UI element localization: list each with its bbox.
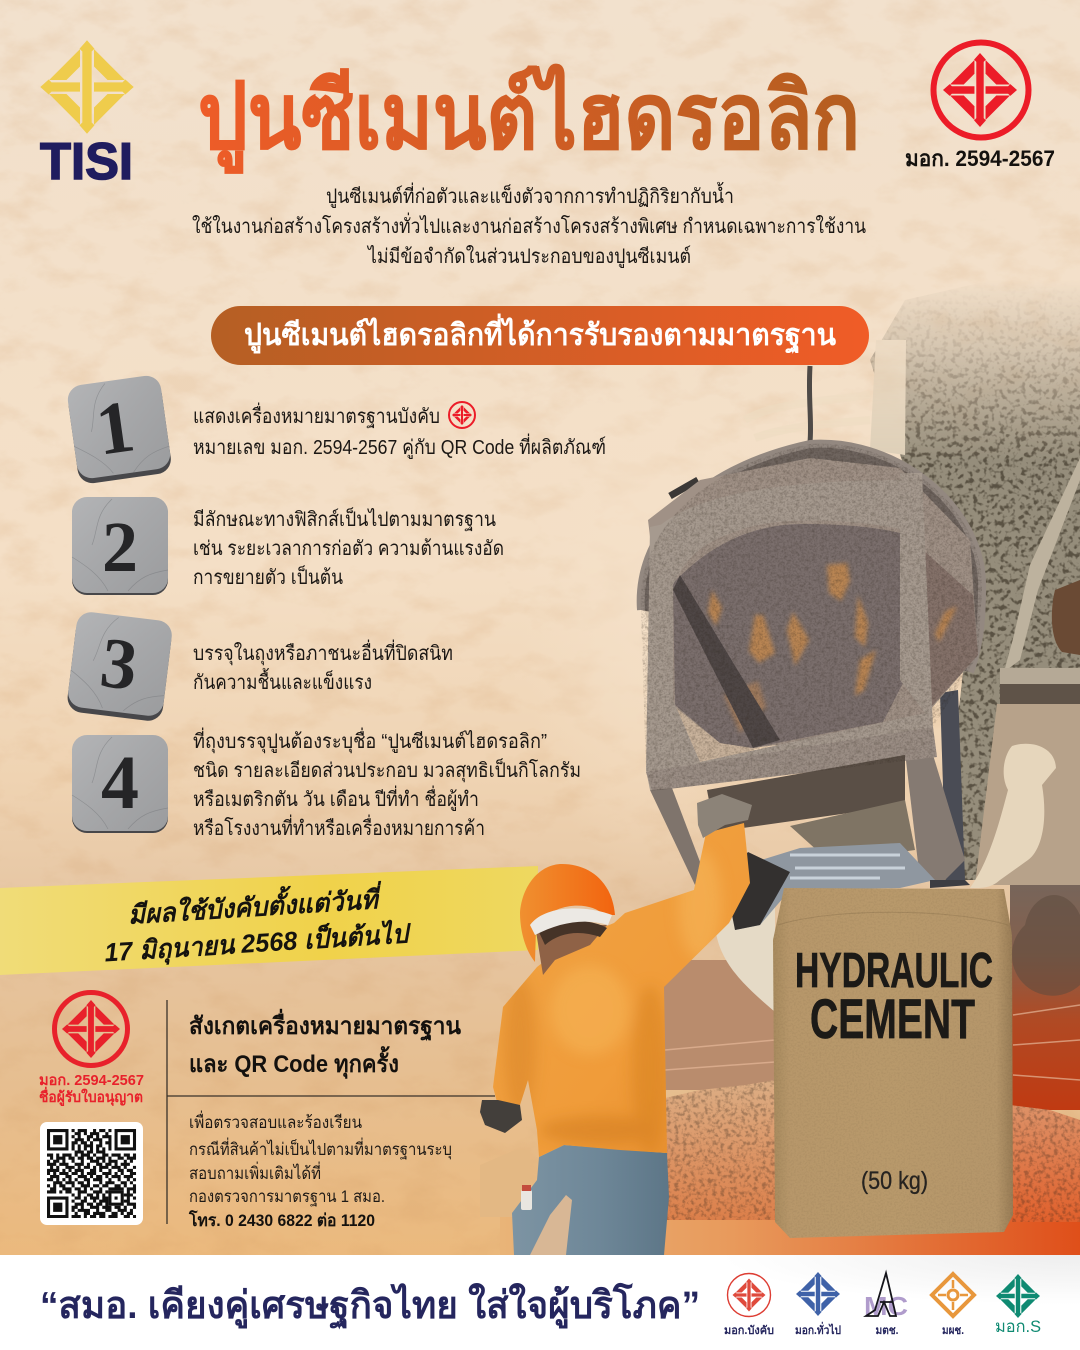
logo: mandatory standard — [724, 1274, 774, 1337]
dark cone window — [673, 524, 903, 748]
bag label: HYDRAULIC — [795, 944, 993, 998]
contact text: โทร. 0 2430 6822 ต่อ 1120 — [188, 1210, 375, 1230]
logo: community product — [932, 1274, 974, 1337]
logo: MPC tower: มตช. — [876, 1325, 898, 1337]
frame — [646, 473, 935, 790]
tile 4 — [72, 735, 168, 833]
far legs — [905, 690, 965, 880]
heading pill — [211, 306, 869, 365]
bag label — [795, 944, 993, 1195]
item 2 text: มีลักษณะทางฟิสิกส์เป็นไปตามมาตรฐาน — [193, 506, 496, 531]
logo: MPC tower — [864, 1273, 908, 1337]
rope — [809, 366, 811, 442]
logo: TISI — [40, 40, 134, 191]
notice panel — [167, 1000, 495, 1230]
contact text: กรณีที่สินค้าไม่เป็นไปตามที่มาตรฐานระบุ — [189, 1137, 452, 1160]
contact text: เพื่อตรวจสอบและร้องเรียน — [189, 1110, 362, 1132]
intro paragraph: ใช้ในงานก่อสร้างโครงสร้างทั่วไปและงานก่อสร้างโครงสร้างพิเศษ กำหนดเฉพาะการใช้งาน — [192, 212, 866, 238]
intro paragraph: ปูนซีเมนต์ที่ก่อตัวและแข็งตัวจากการทำปฏิกิริยากับน้ำ — [326, 182, 734, 209]
slogan: “สมอ. เคียงคู่เศรษฐกิจไทย ใส่ใจผู้บริโภค” — [40, 1282, 700, 1330]
standard mark with licensee label: มอก. 2594-2567 — [39, 1073, 144, 1089]
item 3 text: บรรจุในถุงหรือภาชนะอื่นที่ปิดสนิท — [193, 639, 453, 666]
title: ปูนซีเมนต์ไฮดรอลิก — [198, 64, 860, 174]
glove raised — [697, 794, 752, 838]
heading pill: ปูนซีเมนต์ไฮดรอลิกที่ได้การรับรองตามมาตรฐาน — [244, 313, 836, 355]
icon: small standard mark — [449, 402, 475, 428]
banner text: มีผลใช้บังคับตั้งแต่วันที่ — [127, 879, 383, 930]
standard mark: TIS 2594-2567: มอก. 2594-2567 — [905, 146, 1055, 171]
banner: effective date — [0, 866, 538, 975]
contact text: กองตรวจการมาตรฐาน 1 สมอ. — [189, 1187, 385, 1207]
neck and head — [535, 921, 607, 975]
notice heading: สังเกตเครื่องหมายมาตรฐาน — [189, 1008, 462, 1042]
item 1 text: แสดงเครื่องหมายมาตรฐานบังคับ — [193, 402, 440, 428]
bag label: CEMENT — [810, 987, 975, 1050]
photo: cloth rag — [970, 744, 1056, 888]
logo: community product: มผช. — [942, 1325, 964, 1337]
logo: TIS S: มอก.S — [995, 1317, 1041, 1336]
item 4 text: หรือโรงงานที่ทำหรือเครื่องหมายการค้า — [193, 814, 485, 840]
cone body — [648, 458, 978, 748]
item 4 text: หรือเมตริกตัน วัน เดือน ปีที่ทำ ชื่อผู้ทำ — [193, 785, 479, 812]
logo: general standard — [795, 1272, 841, 1337]
footer band — [0, 1255, 1080, 1350]
item 2 text: การขยายตัว เป็นต้น — [193, 564, 343, 589]
tile 2 — [72, 497, 168, 595]
item 4 text: ที่ถุงบรรจุปูนต้องระบุชื่อ “ปูนซีเมนต์ไฮดรอลิก” — [193, 727, 547, 754]
item 4 text — [193, 727, 581, 840]
item 3 text — [193, 639, 453, 694]
notice heading: และ QR Code ทุกครั้ง — [189, 1045, 399, 1080]
contact text: สอบถามเพิ่มเติมได้ที่ — [189, 1161, 321, 1183]
tool belt — [521, 1185, 572, 1255]
tile 4: 4 — [101, 741, 139, 825]
diagonal strut — [673, 575, 780, 748]
logo: general standard: มอก.ทั่วไป — [795, 1321, 841, 1337]
logo: TIS S — [995, 1274, 1041, 1336]
logo: MPC tower: MC — [864, 1291, 908, 1321]
item 2 text: เช่น ระยะเวลาการก่อตัว ความต้านแรงอัด — [193, 538, 504, 560]
hard hat — [520, 864, 615, 962]
intro paragraph — [192, 182, 866, 269]
bag label: (50 kg) — [861, 1167, 928, 1195]
item 4 text: ชนิด รายละเอียดส่วนประกอบ มวลสุทธิเป็นกิโลกรัม — [193, 757, 581, 783]
item 1 text: หมายเลข มอก. 2594-2567 คู่กับ QR Code ที่ผลิตภัณฑ์ — [193, 433, 606, 460]
standard mark with licensee label: ชื่อผู้รับใบอนุญาต — [39, 1086, 143, 1106]
rim — [641, 444, 982, 672]
QR code — [40, 1122, 143, 1225]
banner text — [101, 877, 413, 969]
photo: sand piles and bottom strip — [480, 1075, 1080, 1255]
photo: concrete bucket — [640, 366, 985, 930]
standard mark with licensee label — [39, 992, 144, 1106]
photo: cement bag — [770, 885, 1015, 1240]
item 3 text: กันความชื้นและแข็งแรง — [193, 668, 372, 694]
tile 3 — [66, 611, 173, 722]
item 1 text — [193, 402, 606, 460]
glove lowered — [480, 1100, 522, 1133]
tile 2: 2 — [102, 507, 138, 587]
jeans — [512, 1145, 669, 1255]
rubble under bucket — [725, 843, 970, 930]
logo: mandatory standard: มอก.บังคับ — [724, 1324, 774, 1337]
contact text — [188, 1110, 452, 1230]
item 2 text — [193, 506, 504, 589]
tile 3: 3 — [96, 622, 142, 706]
intro paragraph: ไม่มีข้อจำกัดในส่วนประกอบของปูนซีเมนต์ — [366, 245, 691, 269]
standard mark: TIS 2594-2567 — [905, 42, 1055, 171]
frame underside — [707, 755, 905, 832]
logo: TISI: TISI — [40, 133, 133, 191]
tile 1 — [66, 374, 173, 485]
orange rust patches — [708, 563, 957, 733]
gap below cone — [668, 700, 760, 765]
mid background behind bag — [660, 960, 775, 1090]
tile 1: 1 — [91, 385, 139, 472]
near leg — [650, 788, 705, 885]
photo: construction worker — [480, 794, 755, 1255]
banner text: 17 มิถุนายน 2568 เป็นต้นไป — [103, 917, 413, 969]
photo: concrete pour and site background — [660, 260, 1080, 1110]
notice heading — [189, 1008, 462, 1080]
